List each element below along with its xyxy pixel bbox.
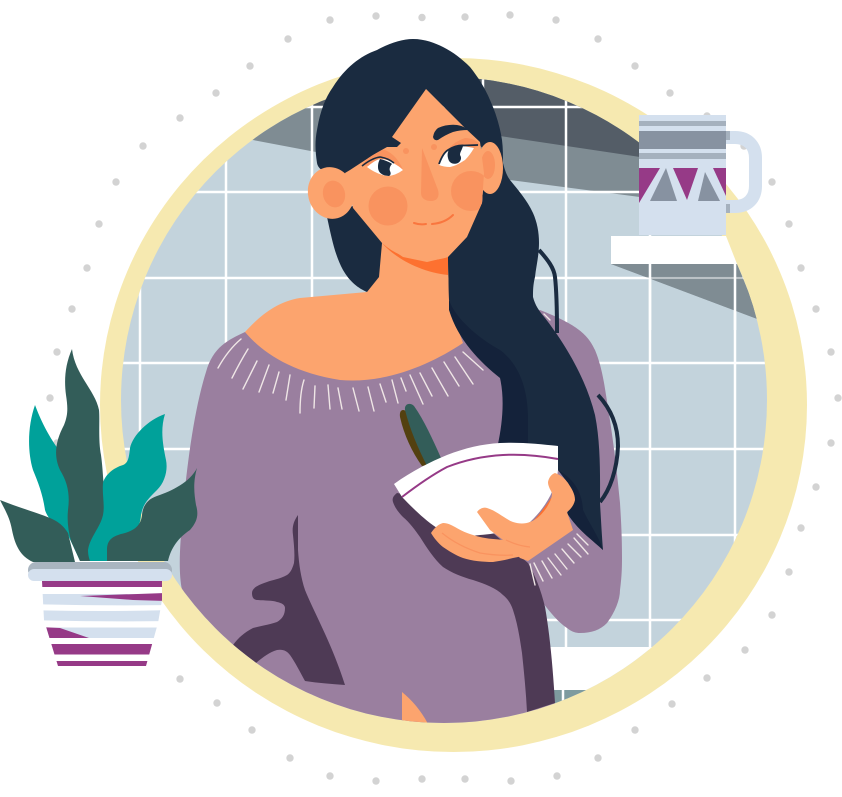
tiled wall [121, 78, 767, 723]
bowl inner orange [533, 492, 555, 521]
hair back [327, 180, 470, 300]
shelf [611, 236, 737, 264]
arm shadow [393, 493, 555, 712]
hair shadow by hand [558, 470, 603, 550]
yellow ring [100, 58, 807, 752]
skin at hem [402, 692, 428, 724]
spoon [400, 404, 441, 466]
dark right leaf [107, 468, 197, 561]
face [345, 89, 491, 262]
hair [316, 39, 618, 550]
left eye [362, 157, 403, 176]
bowl [394, 443, 558, 536]
mug handle [726, 138, 756, 206]
mouth [414, 215, 453, 224]
hair shadow [449, 300, 528, 445]
teal left leaf [29, 405, 100, 561]
dark left leaf [0, 500, 75, 562]
sweater [180, 310, 622, 730]
right ear [477, 142, 503, 194]
cuff ribs [530, 534, 588, 585]
neck shadow [382, 243, 448, 275]
hair strand upper [539, 250, 557, 333]
mug pattern [639, 168, 726, 203]
dark centre leaf [56, 349, 115, 561]
hand [431, 473, 575, 562]
cheeks [362, 138, 491, 226]
mug body [639, 115, 726, 235]
pot rim [28, 562, 172, 578]
bowl stripe [402, 455, 558, 497]
nose [421, 148, 439, 201]
fingers [431, 523, 528, 562]
plant [0, 349, 197, 671]
mug [639, 115, 756, 235]
neck and shoulder [245, 243, 463, 381]
pot body [42, 581, 162, 666]
right eyebrow [433, 125, 468, 140]
hair strand lower [598, 395, 618, 502]
moles [403, 148, 409, 154]
right eye [439, 145, 478, 167]
left ear [302, 162, 360, 224]
collar ribs [218, 314, 550, 413]
woman: sweater and body [180, 310, 622, 730]
sweater fold shadow [233, 515, 345, 685]
teal right leaf [88, 414, 167, 561]
hair main [316, 39, 603, 550]
